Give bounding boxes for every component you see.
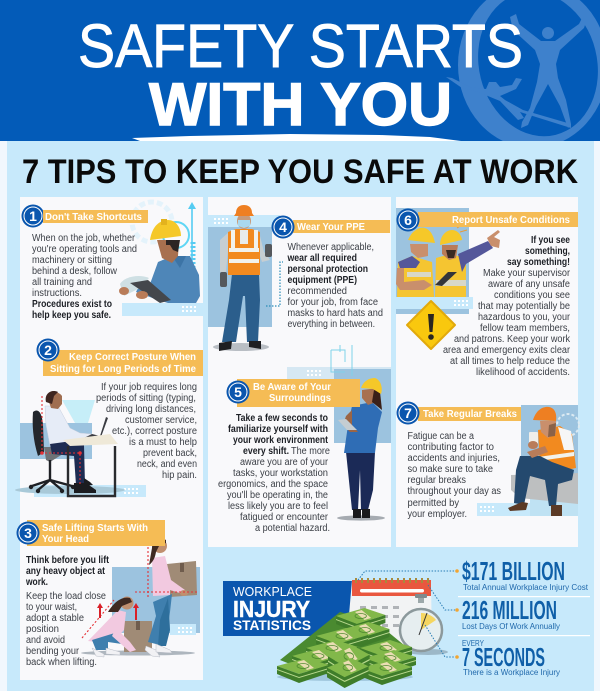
tip 5 text: tasks, your workstation: [233, 468, 328, 479]
tip 4 text: wear all required: [287, 253, 357, 264]
tip 3 text: back when lifting.: [26, 657, 97, 668]
tip 1 text: [32, 233, 137, 321]
panel: left column: [15, 197, 203, 680]
stat: frequency: [462, 638, 561, 677]
tip 1 text: machinery or sitting: [32, 255, 112, 266]
tip 7 text: so make sure to take: [408, 464, 493, 475]
tip 1 text: all training and: [32, 277, 92, 288]
tip 1 text: Procedures exist to: [32, 299, 112, 310]
tip 6 text: fellow team members,: [480, 323, 570, 334]
illustration: worker in PPE: [208, 205, 283, 351]
tip 2 text: periods of sitting (typing,: [96, 393, 196, 404]
stat: lost days: Lost Days Of Work Annually: [462, 621, 561, 631]
tip 5 text: you'll be operating in, the: [227, 490, 328, 501]
tip 5 heading: Be Aware of Your: [253, 382, 331, 393]
tip 5 text: aware you are of your: [240, 457, 329, 468]
tip 5 badge: 5: [234, 384, 242, 400]
tip 1 badge: [22, 204, 44, 228]
tip 5 text: your work environment: [233, 435, 329, 446]
tip 3 text: position: [26, 624, 59, 635]
tip 5 text: ergonomics, and the space: [218, 479, 328, 490]
header banner: [0, 0, 600, 149]
tip 6 text: conditions you see: [494, 290, 570, 301]
tip 3 text: Keep the load close: [26, 591, 106, 602]
illustration: worker on a break: [477, 405, 579, 516]
tip 2 text: is a must to help: [129, 437, 197, 448]
tip 7 text: contributing factor to: [408, 442, 494, 453]
tip 3: [16, 520, 200, 668]
tip 6 text: area and emergency exits clear: [443, 345, 571, 356]
tip 1 text: you're operating tools and: [32, 244, 137, 255]
tip 3 text: any heavy object at: [26, 566, 106, 577]
title line 2: WITH YOU: [149, 71, 452, 138]
tip 4 text: everything in between.: [288, 319, 375, 330]
tip 4 text: Whenever applicable,: [288, 242, 374, 253]
illustration: safe lifting: [81, 538, 200, 657]
icon: warning sign: [407, 301, 455, 349]
tip 2 badge: [36, 338, 60, 362]
tip 6: [396, 208, 578, 378]
tip 7 badge: 7: [404, 405, 412, 421]
stat: frequency: There is a Workplace Injury: [463, 667, 561, 677]
tip 1 heading: Don't Take Shortcuts: [45, 212, 142, 223]
tip 3 text: Think before you lift: [26, 555, 110, 566]
tip 6 text: and patrons. Keep your work: [454, 334, 570, 345]
tip 4 badge: 4: [279, 219, 287, 235]
tip 4 badge: [272, 216, 294, 238]
tip 5: [218, 345, 391, 534]
panel: workplace injury statistics: [223, 556, 590, 688]
tip 5 heading: [237, 379, 360, 407]
tip 7 badge: [396, 402, 420, 424]
tip 5 heading: Surroundings: [269, 393, 331, 404]
brush stroke underline: [132, 134, 461, 141]
tip 1 text: When on the job, whether: [32, 233, 136, 244]
tip 2: [15, 338, 203, 497]
tip 7: [396, 402, 579, 520]
tip 2 text: driving long distances,: [106, 404, 196, 415]
watermark: ring and figures: [446, 0, 600, 149]
tip 5 text: The more: [291, 446, 330, 457]
title line 1: SAFETY STARTS: [78, 12, 523, 80]
tip 7 text: accidents and injuries,: [408, 453, 500, 464]
tip 1: [22, 202, 203, 321]
tip 3 heading: [27, 520, 165, 546]
tip 7 text: regular breaks: [408, 475, 466, 486]
icon: stacks of money: [277, 608, 416, 688]
tip 6 text: say something!: [507, 257, 570, 268]
tip 3 text: work.: [25, 577, 48, 588]
tip 7 text: throughout your day as: [408, 486, 501, 497]
tip 3 text: [25, 555, 110, 668]
tip 2 text: prevent back,: [143, 448, 197, 459]
stat: annual cost: Total Annual Workplace Injury Cost: [463, 582, 589, 592]
tip 4 heading: [293, 220, 390, 233]
stat: lost days: [462, 595, 561, 631]
tip 5 text: every shift.: [243, 446, 289, 457]
tip 3 text: adopt a stable: [26, 613, 84, 624]
tip 5 text: a potential hazard.: [255, 523, 330, 534]
tip 4 text: masks to hard hats and: [288, 308, 383, 319]
tip 4 text: equipment (PPE): [288, 275, 357, 286]
tip 3 text: to your waist,: [26, 602, 77, 613]
tip 1 text: instructions.: [32, 288, 82, 299]
tip 6 text: at all times to help reduce the: [450, 356, 570, 367]
tip 2 text: hip pain.: [162, 470, 197, 481]
tip 6 text: [443, 235, 571, 378]
tip 7 text: your employer.: [408, 509, 467, 520]
tip 2 heading: Keep Correct Posture When: [69, 352, 196, 363]
tip 2 text: If your job requires long: [101, 382, 197, 393]
tip 3 heading: Your Head: [42, 534, 89, 545]
tip 4 text: personal protection: [288, 264, 368, 275]
tip 3 text: bending your: [26, 646, 80, 657]
tip 6 text: hazardous to you, your: [478, 312, 571, 323]
stat: frequency: EVERY: [462, 638, 484, 648]
tip 1 badge: 1: [29, 208, 37, 224]
tip 7 heading: Take Regular Breaks: [423, 409, 517, 420]
tip 4: [208, 205, 390, 351]
tip 7 text: Fatigue can be a: [408, 431, 475, 442]
tip 1 text: behind a desk, follow: [32, 266, 118, 277]
tip 3 badge: [16, 522, 40, 544]
tip 6 badge: [396, 208, 420, 232]
tip 6 text: likelihood of accidents.: [476, 367, 570, 378]
tip 3 text: and avoid: [26, 635, 65, 646]
icon: calendar: [346, 578, 432, 650]
tip 5 text: fatigued or encounter: [240, 512, 329, 523]
illustration: worker with tablet: [119, 202, 203, 316]
tip 5 text: [218, 413, 330, 534]
tip 1 text: help keep you safe.: [32, 310, 111, 321]
tip 6 text: aware of any unsafe: [488, 279, 570, 290]
tip 3 badge: 3: [24, 525, 32, 541]
tip 2 text: customer service,: [125, 415, 197, 426]
statistics title box: WORKPLACE: [233, 584, 312, 599]
tip 4 text: for your job, from face: [288, 297, 378, 308]
tip 2 heading: Sitting for Long Periods of Time: [50, 364, 196, 375]
tip 6 badge: 6: [404, 212, 412, 228]
tip 2 badge: 2: [44, 342, 52, 358]
tip 7 text: [408, 431, 501, 520]
icon: stopwatch: [400, 594, 448, 655]
statistics title box: [223, 581, 353, 636]
tip 4 text: [287, 242, 383, 330]
tip 6 text: that may potentially be: [478, 301, 570, 312]
illustration: aware worker: [287, 345, 391, 521]
tip 5 badge: [226, 380, 250, 404]
tip 6 heading: [418, 212, 578, 227]
tip 2 text: neck, and even: [137, 459, 197, 470]
tip 2 heading: [43, 350, 203, 376]
tip 4 text: recommended: [288, 286, 347, 297]
tip 6 text: If you see: [531, 235, 571, 246]
tip 6 heading: Report Unsafe Conditions: [452, 215, 570, 226]
illustration: seated posture at desk: [15, 391, 146, 497]
tip 6 text: something,: [525, 246, 570, 257]
tip 7 text: permitted by: [408, 498, 459, 509]
tip 5 text: less likely you are to feel: [228, 501, 328, 512]
panel: middle column: [208, 197, 391, 547]
tip 5 text: familiarize yourself with: [228, 424, 328, 435]
connector lines: [358, 571, 455, 657]
statistics title box: STATISTICS: [233, 617, 311, 633]
illustration: two workers pointing: [396, 208, 500, 314]
panel: right column: [396, 197, 579, 547]
tip 2 text: [96, 382, 197, 481]
tip 3 heading: Safe Lifting Starts With: [42, 523, 148, 534]
tip 5 text: Take a few seconds to: [236, 413, 328, 424]
statistics title box: INJURY: [233, 596, 310, 622]
tip 4 heading: Wear Your PPE: [297, 222, 365, 233]
tip 2 text: etc.), correct posture: [112, 426, 197, 437]
connector dots: [455, 569, 459, 659]
tip 6 text: Make your supervisor: [483, 268, 571, 279]
